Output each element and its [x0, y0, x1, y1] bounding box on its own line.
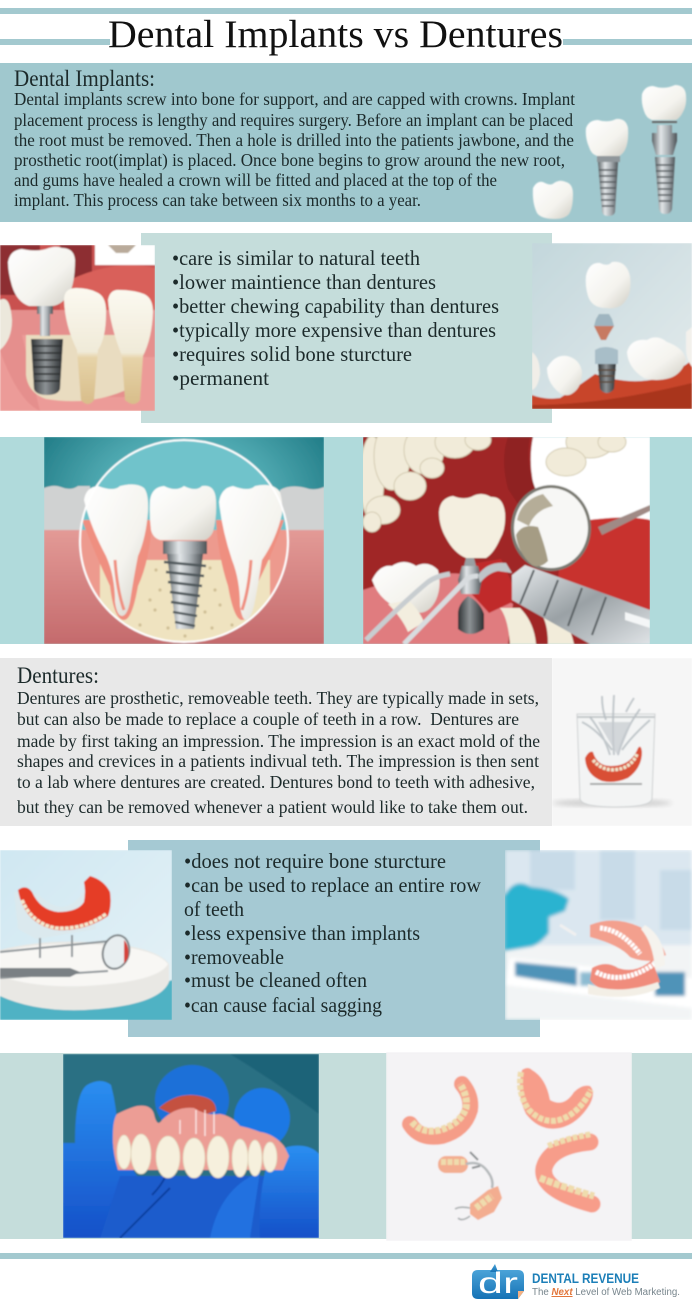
list: implant bullet points: •typically more expensive than dentures — [172, 318, 496, 342]
list: denture bullet points: •does not require bone sturcture — [184, 849, 446, 873]
text block: implant description: placement process is lengthy and requires surgery. Before an implant can be placed — [14, 110, 573, 130]
image: implant crown with dental tools — [360, 422, 650, 644]
text block: implant description: the root must be removed. Then a hole is drilled into the patients jawbone, and the — [14, 130, 574, 150]
list: denture bullet points: •can cause facial sagging — [184, 993, 382, 1017]
text block: dentures description: to a lab where dentures are created. Dentures bond to teeth with adhesive, — [17, 772, 535, 792]
image: denture on white disc with mirror — [0, 850, 172, 1020]
list: implant bullet points: •better chewing capability than dentures — [172, 294, 499, 318]
brand name: DENTAL REVENUE — [532, 1271, 639, 1286]
image: four denture sets — [386, 1052, 632, 1241]
text block: dentures description: but they can be removed whenever a patient would like to take them out. — [17, 797, 528, 817]
list: implant bullet points: •requires solid bone sturcture — [172, 342, 412, 366]
heading: dental implants: Dental Implants: — [14, 66, 155, 91]
footer rule — [0, 1253, 692, 1259]
panel: implant pros and cons — [141, 233, 552, 423]
title: Dental Implants vs Dentures — [108, 13, 563, 56]
text block: dentures description: Dentures are prosthetic, removeable teeth. They are typically made in sets, — [17, 688, 539, 708]
band: implant images — [0, 437, 692, 644]
panel: dentures — [0, 658, 552, 826]
logo: dental revenue — [472, 1264, 680, 1300]
image: implant illustration between teeth — [44, 437, 324, 650]
tagline: The Next Level of Web Marketing. — [532, 1287, 680, 1298]
text block: implant description — [14, 89, 575, 210]
panel: denture pros and cons — [128, 840, 540, 1037]
text block: dentures description: made by first taking an impression. The impression is an exact mold of the — [17, 731, 540, 751]
list: denture bullet points: •must be cleaned often — [184, 968, 367, 992]
heading: dentures: Dentures: — [17, 663, 99, 688]
band: denture images — [0, 1053, 692, 1239]
list: implant bullet points: •permanent — [172, 366, 269, 390]
text block: implant description: prosthetic root(implat) is placed. Once bone begins to grow around the new root, — [14, 150, 565, 171]
image: denture dropped in glass of water — [552, 658, 692, 826]
icon: dr mark: dr — [478, 1267, 518, 1300]
image: implant cross section — [0, 245, 155, 411]
header band: rule behind title — [0, 39, 692, 45]
text block: implant description: Dental implants screw into bone for support, and are capped with crowns. Implant — [14, 89, 575, 109]
list: implant bullet points: •care is similar to natural teeth — [172, 246, 420, 270]
list: denture bullet points — [184, 849, 482, 1017]
text block: dentures description — [17, 688, 540, 817]
list: implant bullet points — [172, 246, 499, 390]
text block: dentures description: but can also be made to replace a couple of teeth in a row. Dentures are — [17, 709, 519, 729]
icon: dr mark — [472, 1264, 524, 1300]
list: implant bullet points: •lower maintience than dentures — [172, 270, 436, 294]
icon: upper denture top right — [520, 1068, 593, 1129]
panel: dental implants — [0, 63, 692, 222]
image: implant exploded view — [532, 243, 692, 409]
header band: top rule — [0, 8, 692, 14]
list: denture bullet points: •removeable — [184, 945, 284, 969]
icon: lower denture top left — [410, 1084, 470, 1137]
image: upper denture held in blue glove — [63, 1054, 319, 1238]
text block: implant description: and gums have healed a crown will be fitted and placed at the top of the — [14, 170, 497, 190]
text block: dentures description: shapes and crevices in a patients indivual teth. The impression is then sent — [17, 751, 539, 771]
list: denture bullet points: •can be used to replace an entire row — [184, 873, 482, 897]
list: denture bullet points: •less expensive than implants — [184, 921, 420, 945]
icon: lower denture right — [540, 1134, 594, 1204]
list: denture bullet points: of teeth — [184, 897, 244, 921]
icon: partial denture — [438, 1152, 502, 1220]
icon: implant components — [533, 85, 686, 219]
text block: implant description: implant. This process can take between six months to a year. — [14, 190, 421, 210]
image: dentist with denture model — [505, 850, 692, 1020]
